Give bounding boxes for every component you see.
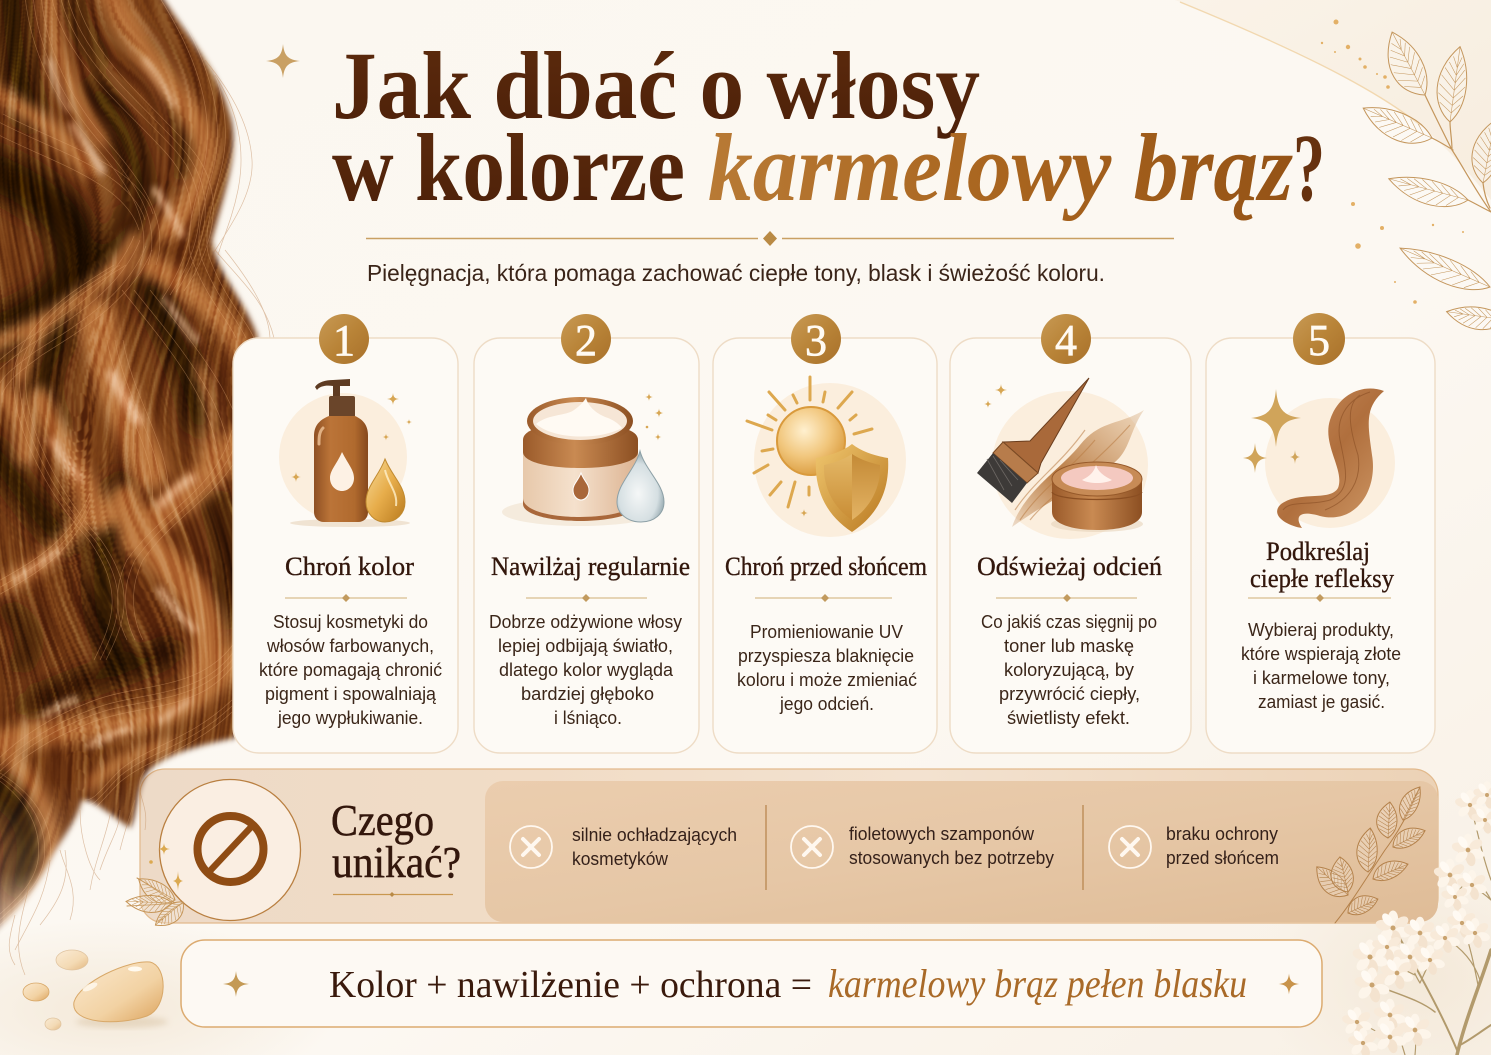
body text: lepiej odbijają światło,: [498, 636, 673, 656]
body text: Promieniowanie UV: [750, 622, 903, 642]
card 5: warm highlights: [1206, 313, 1435, 753]
icon: tint brush, hair and mask jar: [977, 378, 1148, 539]
gold speckles top right: [1321, 20, 1464, 304]
badge 5: [1293, 313, 1345, 365]
heading: Odświeżaj odcień: [977, 552, 1162, 581]
body text: i karmelowe tony,: [1253, 668, 1390, 688]
formula text: Kolor + nawilżenie + ochrona =: [329, 964, 812, 1006]
sparkle left: [223, 971, 249, 997]
heading: what to avoid: Czego: [331, 796, 434, 845]
title: [332, 32, 1325, 221]
divider: [1248, 594, 1391, 602]
heading: Podkreślaj: [1266, 537, 1370, 566]
badge 3: [791, 314, 841, 365]
body text: [259, 612, 442, 728]
body text: które pomagają chronić: [259, 660, 442, 680]
body text: świetlisty efekt.: [1007, 708, 1130, 728]
body text: koloryzującą, by: [1004, 660, 1134, 680]
body text: koloru i może zmieniać: [737, 670, 917, 690]
item 3: braku ochrony: [1166, 824, 1278, 844]
badge 2: 2: [575, 316, 597, 365]
body text: przyspiesza blaknięcie: [738, 646, 914, 666]
body text: dlatego kolor wygląda: [499, 660, 674, 680]
subtitle: Pielęgnacja, która pomaga zachować ciepłe tony, blask i świeżość koloru.: [367, 260, 1105, 286]
badge 4: 4: [1055, 316, 1077, 365]
item 2: stosowanych bez potrzeby: [849, 848, 1054, 868]
water droplets: [23, 950, 168, 1030]
body text: Dobrze odżywione włosy: [489, 612, 682, 632]
badge 1: 1: [333, 316, 355, 365]
body text: Co jakiś czas sięgnij po: [981, 612, 1157, 632]
item 1: kosmetyków: [572, 849, 669, 869]
badge 2: [561, 314, 611, 365]
icon: shampoo bottle with oil drop: [279, 379, 412, 527]
item 2: fioletowych szamponów: [849, 824, 1035, 844]
icon: hair lock with sparkles: [1243, 389, 1395, 528]
title: ?: [1293, 114, 1325, 221]
body text: Stosuj kosmetyki do: [273, 612, 428, 632]
item 3: przed słońcem: [1166, 848, 1279, 868]
title: Jak dbać o włosy: [332, 32, 980, 139]
divider: [755, 594, 892, 602]
body text: Wybieraj produkty,: [1248, 620, 1394, 640]
body text: które wspierają złote: [1241, 644, 1401, 664]
body text: włosów farbowanych,: [266, 636, 434, 656]
formula banner: [181, 940, 1322, 1027]
heading: [1250, 537, 1394, 593]
body text: przywrócić ciepły,: [999, 684, 1140, 704]
body text: jego wypłukiwanie.: [277, 708, 423, 728]
body text: jego odcień.: [779, 694, 874, 714]
title: w kolorze: [332, 114, 685, 221]
band: what to avoid: [140, 769, 1438, 923]
script conclusion: karmelowy brąz pełen blasku: [828, 961, 1247, 1006]
body text: toner lub maskę: [1004, 636, 1134, 656]
small leaves and sparkles at badge: [126, 843, 190, 933]
sparkle next to title: [266, 44, 300, 78]
badge 1: [319, 314, 369, 365]
title divider: [366, 231, 1174, 246]
body text: i lśniąco.: [554, 708, 622, 728]
body text: [1241, 620, 1401, 712]
item 1: silnie ochładzających: [572, 825, 737, 845]
icon: sun and shield: [747, 377, 906, 537]
heading: Chroń przed słońcem: [725, 552, 927, 581]
loose hair wisps: [9, 60, 274, 975]
body text: [489, 612, 682, 728]
card 3: sun protection: [713, 314, 937, 753]
heading: what to avoid: [331, 796, 461, 887]
heading underline: [333, 892, 453, 897]
item 1: [510, 825, 737, 869]
body text: [737, 622, 917, 714]
divider: [285, 594, 407, 602]
item 2: [791, 824, 1054, 868]
heading: what to avoid: unikać?: [332, 838, 461, 887]
card 2: moisturise: [474, 314, 699, 753]
badge 3: 3: [805, 316, 827, 365]
wavy caramel hair: [0, 0, 262, 932]
baby's breath flowers: [1341, 781, 1491, 1055]
body text: zamiast je gasić.: [1258, 692, 1385, 712]
body text: bardziej głęboko: [521, 684, 654, 704]
card 1: protect colour: [233, 314, 458, 753]
decorative line-art leaves top right: [1357, 26, 1491, 333]
sparkle right: [1278, 974, 1300, 994]
divider: [526, 594, 647, 602]
item 3: [1109, 824, 1279, 868]
icon: cream jar with water drop: [502, 393, 664, 526]
heading: Chroń kolor: [285, 552, 414, 581]
card 4: refresh shade: [950, 314, 1191, 753]
divider: [996, 594, 1137, 602]
title: karmelowy brąz: [708, 114, 1293, 221]
line-art branch in panel: [1309, 782, 1428, 923]
badge 4: [1041, 314, 1091, 365]
body text: pigment i spowalniają: [265, 684, 437, 704]
body text: [981, 612, 1157, 728]
heading: Nawilżaj regularnie: [491, 552, 690, 581]
heading: ciepłe refleksy: [1250, 564, 1394, 593]
badge 5: 5: [1308, 316, 1330, 365]
panel: things to avoid: [485, 781, 1438, 922]
prohibition badge: [160, 780, 300, 920]
